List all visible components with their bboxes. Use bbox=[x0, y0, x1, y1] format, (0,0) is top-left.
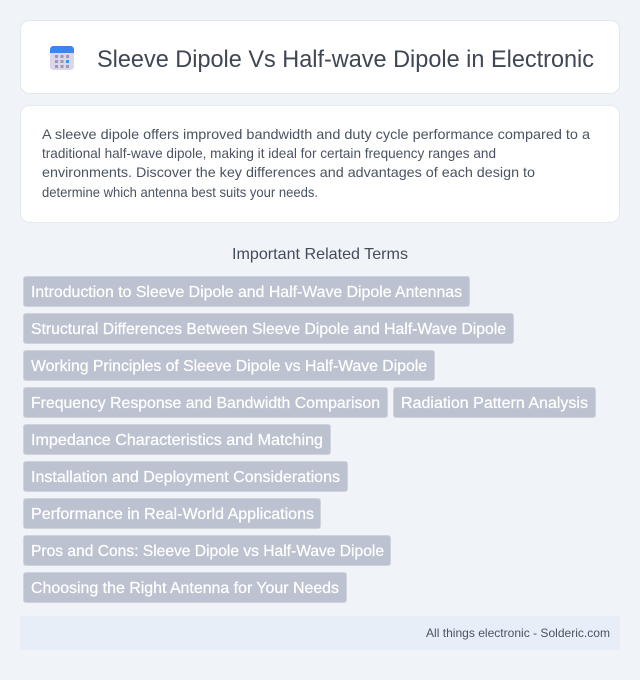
panel: header bbox=[20, 20, 620, 94]
tag: choosing antenna bbox=[24, 572, 346, 602]
tag: installation: Installation and Deployment Considerations bbox=[31, 469, 340, 486]
tag: frequency response bbox=[24, 388, 388, 418]
tag: installation bbox=[24, 462, 348, 492]
icon: calendar bbox=[50, 46, 74, 70]
text block: description: environments. Discover the key differences and advantages of each design to bbox=[42, 164, 535, 180]
tag: pros and cons bbox=[24, 536, 390, 566]
tag: choosing antenna: Choosing the Right Antenna for Your Needs bbox=[31, 580, 339, 597]
tag: structural differences: Structural Differences Between Sleeve Dipole and Half-Wave Dipole bbox=[31, 321, 506, 338]
text block: description: A sleeve dipole offers improved bandwidth and duty cycle performance compared to a bbox=[42, 126, 590, 142]
tag list bbox=[24, 276, 596, 602]
tag: radiation pattern: Radiation Pattern Analysis bbox=[401, 395, 588, 412]
tag: performance: Performance in Real-World Applications bbox=[31, 506, 314, 523]
tag: frequency response: Frequency Response and Bandwidth Comparison bbox=[31, 395, 380, 412]
tag: impedance bbox=[24, 424, 330, 454]
text block: description: determine which antenna best suits your needs. bbox=[42, 184, 318, 200]
tag: performance bbox=[24, 498, 320, 528]
footer credit: All things electronic - Solderic.com bbox=[426, 626, 610, 640]
tag: radiation pattern bbox=[394, 388, 596, 418]
title: Sleeve Dipole Vs Half-wave Dipole in Electronic bbox=[97, 46, 594, 73]
tag: impedance: Impedance Characteristics and Matching bbox=[31, 432, 323, 449]
heading: related terms: Important Related Terms bbox=[232, 246, 408, 263]
text block: description bbox=[42, 126, 590, 200]
tag: introduction bbox=[24, 276, 470, 306]
tag: introduction: Introduction to Sleeve Dipole and Half-Wave Dipole Antennas bbox=[31, 284, 462, 301]
text block: description: traditional half-wave dipole, making it ideal for certain frequency ranges and bbox=[42, 145, 496, 161]
tag: working principles: Working Principles of Sleeve Dipole vs Half-Wave Dipole bbox=[31, 358, 427, 375]
tag: pros and cons: Pros and Cons: Sleeve Dipole vs Half-Wave Dipole bbox=[31, 543, 384, 560]
tag: structural differences bbox=[24, 314, 514, 344]
panel: description bbox=[20, 106, 620, 222]
tag: working principles bbox=[24, 350, 434, 380]
footer bbox=[20, 616, 620, 650]
